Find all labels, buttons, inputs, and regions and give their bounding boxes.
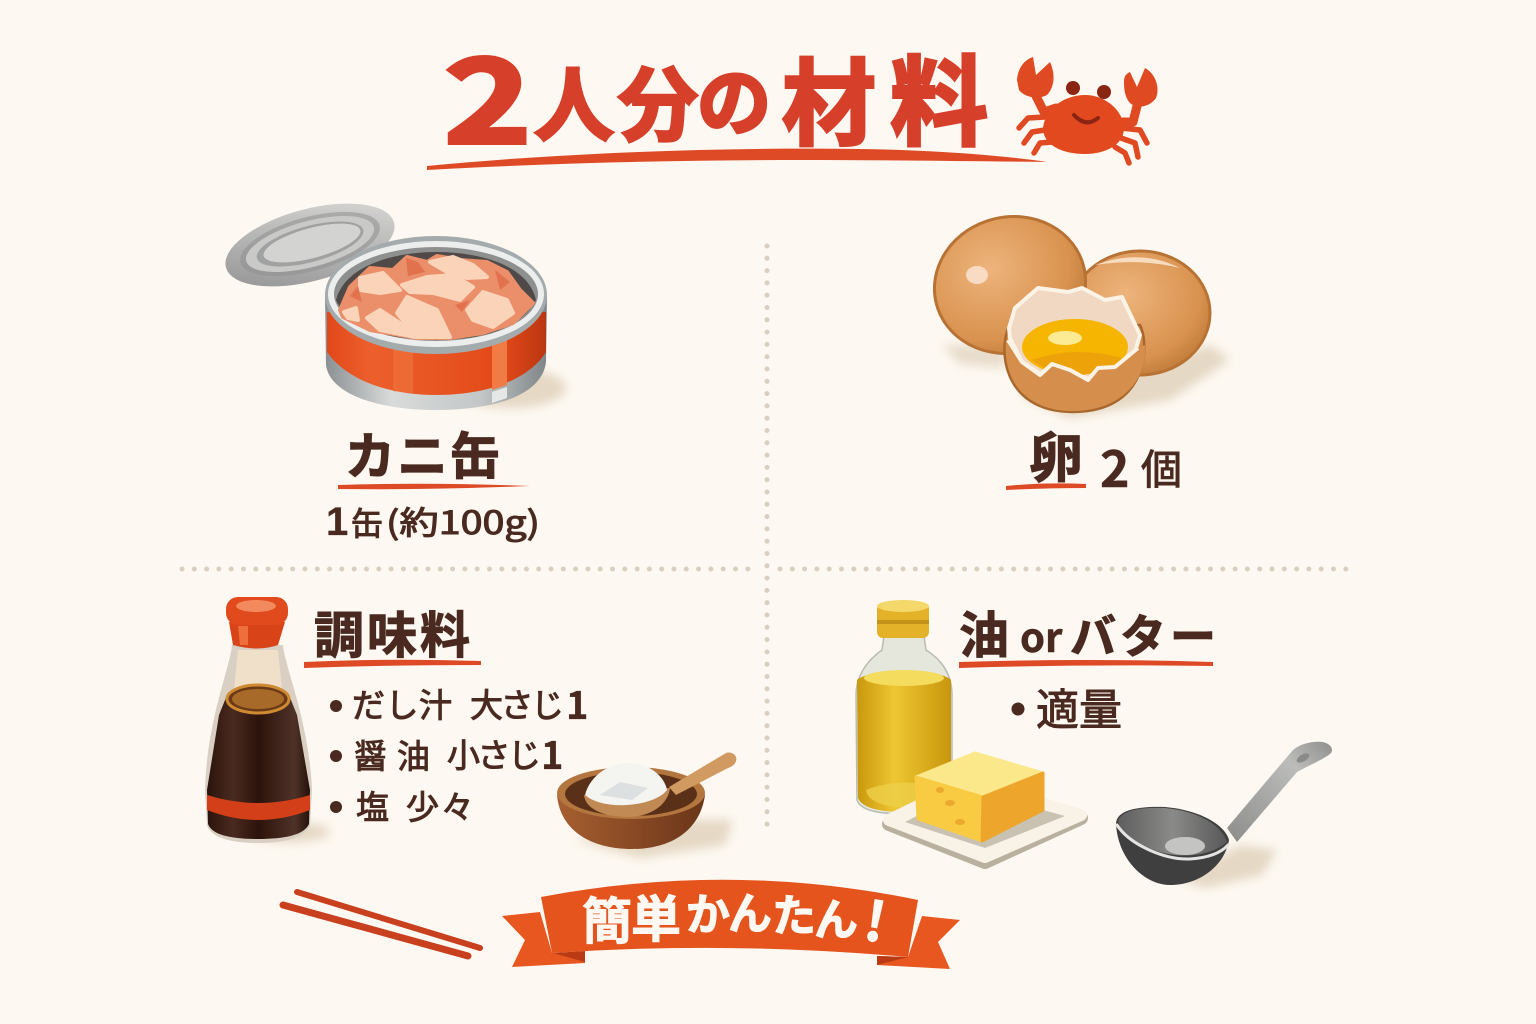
- seasonings list: 大さじ: [470, 679, 564, 727]
- ingredient label: crab can: 1: [326, 500, 348, 544]
- seasonings list: 塩: [356, 781, 389, 829]
- title underline: [427, 149, 1047, 170]
- icon: crab can: [217, 188, 566, 410]
- icon: salt bowl: [557, 753, 736, 858]
- ingredient label: crab can: (約100g): [386, 498, 540, 544]
- ingredient label: egg: 卵: [1029, 414, 1083, 493]
- icon: eggs: [920, 201, 1230, 418]
- icon: butter: [889, 753, 1081, 862]
- can body: [325, 295, 547, 410]
- ingredient label: crab can: カニ缶: [345, 417, 500, 489]
- ribbon banner: か: [686, 879, 730, 943]
- title: 分: [618, 42, 698, 158]
- ribbon banner: ん: [728, 878, 772, 942]
- title: 料: [890, 24, 988, 166]
- ribbon banner: [502, 877, 960, 969]
- title: [444, 12, 988, 177]
- cracked egg: [1004, 288, 1145, 412]
- ingredient label: oil or butter: バター: [1070, 601, 1216, 667]
- ingredient label: egg: [1006, 414, 1182, 502]
- icon: oil bottle: [856, 600, 952, 814]
- ingredient label: oil or butter: or: [1020, 606, 1063, 664]
- ribbon banner: た: [772, 880, 816, 944]
- seasonings list: 小さじ: [447, 729, 541, 777]
- ingredient label: oil or butter: [959, 596, 1216, 668]
- ribbon banner: 簡: [582, 882, 632, 954]
- seasonings list: [330, 675, 588, 829]
- icon: crab: [1017, 57, 1158, 163]
- ingredient label: egg: 個: [1141, 436, 1182, 496]
- oil quantity: 適量: [1036, 676, 1122, 738]
- icon: ladle: [1116, 742, 1332, 888]
- ribbon banner: !: [859, 877, 893, 958]
- title: の: [697, 44, 771, 151]
- seasonings list: 醤油: [354, 730, 430, 778]
- icon: chopsticks: [283, 892, 480, 956]
- dotted dividers: [182, 246, 1356, 835]
- seasonings list: だし汁: [352, 679, 452, 727]
- ingredient label: oil or butter: 油: [959, 596, 1009, 668]
- title: 人: [534, 42, 614, 158]
- ribbon banner: 単: [631, 880, 681, 952]
- ribbon banner: ん: [814, 884, 858, 948]
- ingredient label: crab can: 缶: [351, 499, 383, 545]
- ingredient label: egg: 2: [1100, 430, 1130, 502]
- crab meat: [340, 256, 533, 338]
- seasonings list: 少々: [406, 781, 474, 829]
- ingredient label: seasonings: 調味料: [314, 596, 470, 668]
- ingredient label: crab can: [326, 417, 540, 545]
- lid: [217, 188, 403, 302]
- title: 2: [444, 12, 531, 177]
- seasonings list: 1: [566, 675, 588, 730]
- seasonings list: 1: [541, 725, 563, 780]
- icon: soy sauce bottle: [205, 597, 330, 843]
- title: 材: [782, 29, 876, 165]
